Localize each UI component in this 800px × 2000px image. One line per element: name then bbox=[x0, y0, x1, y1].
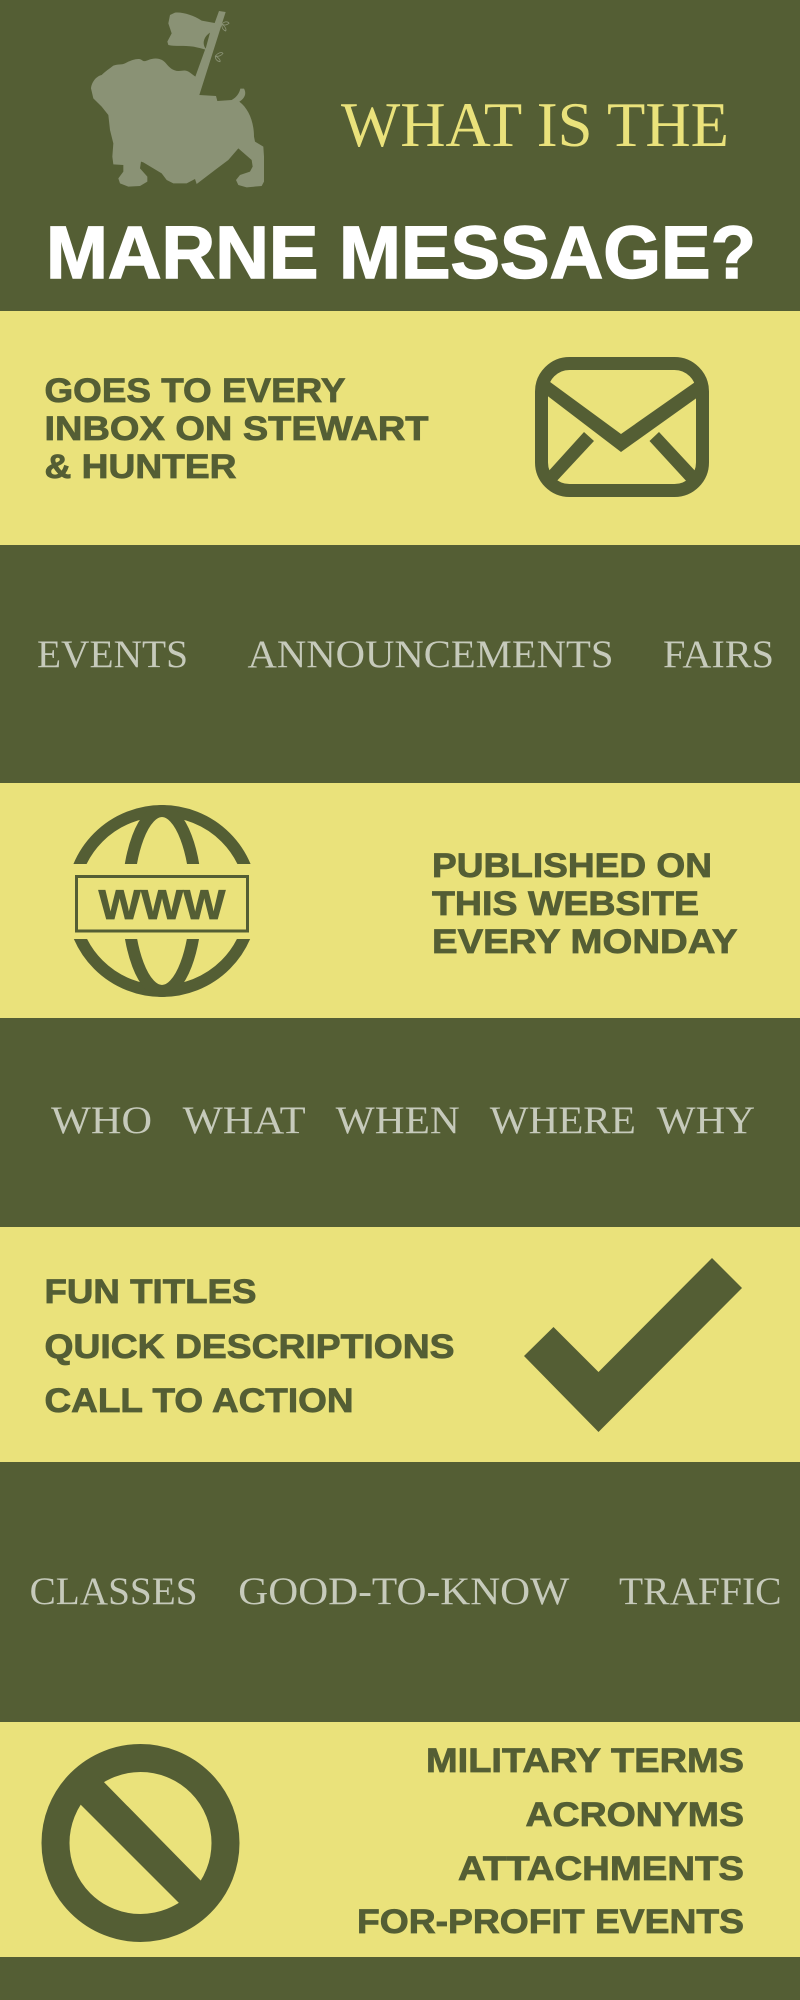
icon: check mark bbox=[524, 1258, 742, 1432]
text: fun titles list: QUICK DESCRIPTIONS bbox=[44, 1328, 454, 1366]
text: goes to every inbox: & HUNTER bbox=[44, 448, 237, 486]
text: excluded items list: FOR-PROFIT EVENTS bbox=[357, 1903, 744, 1941]
text: fun titles list: FUN TITLES bbox=[44, 1273, 256, 1311]
text: excluded items list: ACRONYMS bbox=[526, 1796, 744, 1834]
label: traffic: TRAFFIC bbox=[619, 1570, 782, 1613]
panel: format bbox=[0, 1227, 800, 1462]
label: when: WHEN bbox=[336, 1099, 460, 1142]
panel: five w row bbox=[0, 1018, 800, 1227]
panel: events row bbox=[0, 545, 800, 783]
label: good-to-know: GOOD-TO-KNOW bbox=[238, 1570, 569, 1613]
panel: inbox bbox=[0, 311, 800, 545]
label: events: EVENTS bbox=[37, 633, 188, 676]
label: classes: CLASSES bbox=[30, 1570, 198, 1613]
label: fairs: FAIRS bbox=[663, 633, 774, 676]
footer band bbox=[0, 1957, 800, 2000]
label: where: WHERE bbox=[490, 1099, 636, 1142]
text: published on this website bbox=[432, 847, 738, 961]
text: excluded items list: MILITARY TERMS bbox=[426, 1742, 744, 1780]
heading: what is the: WHAT IS THE bbox=[341, 90, 729, 160]
icon: www globe: WWW bbox=[98, 881, 226, 928]
icon: www globe bbox=[72, 811, 252, 991]
label: announcements: ANNOUNCEMENTS bbox=[248, 633, 614, 676]
panel: header bbox=[0, 0, 800, 311]
text: fun titles list bbox=[44, 1273, 454, 1420]
text: excluded items list bbox=[357, 1742, 744, 1941]
text: goes to every inbox bbox=[44, 372, 429, 486]
text: excluded items list: ATTACHMENTS bbox=[458, 1850, 744, 1888]
label: who: WHO bbox=[51, 1099, 152, 1142]
label: what: WHAT bbox=[183, 1099, 306, 1142]
icon: envelope bbox=[542, 364, 702, 490]
text: fun titles list: CALL TO ACTION bbox=[44, 1382, 354, 1420]
label: why: WHY bbox=[657, 1099, 755, 1142]
panel: classes row bbox=[0, 1462, 800, 1722]
icon: bulldog with flag bbox=[91, 11, 264, 187]
text: published on this website: EVERY MONDAY bbox=[432, 923, 738, 961]
text: goes to every inbox: GOES TO EVERY bbox=[44, 372, 346, 410]
panel: website bbox=[0, 783, 800, 1018]
text: goes to every inbox: INBOX ON STEWART bbox=[44, 410, 429, 448]
panel: not included bbox=[0, 1722, 800, 1957]
heading: marne message: MARNE MESSAGE? bbox=[46, 211, 756, 294]
text: published on this website: PUBLISHED ON bbox=[432, 847, 712, 885]
text: published on this website: THIS WEBSITE bbox=[432, 885, 699, 923]
icon: prohibited sign bbox=[56, 1758, 226, 1928]
